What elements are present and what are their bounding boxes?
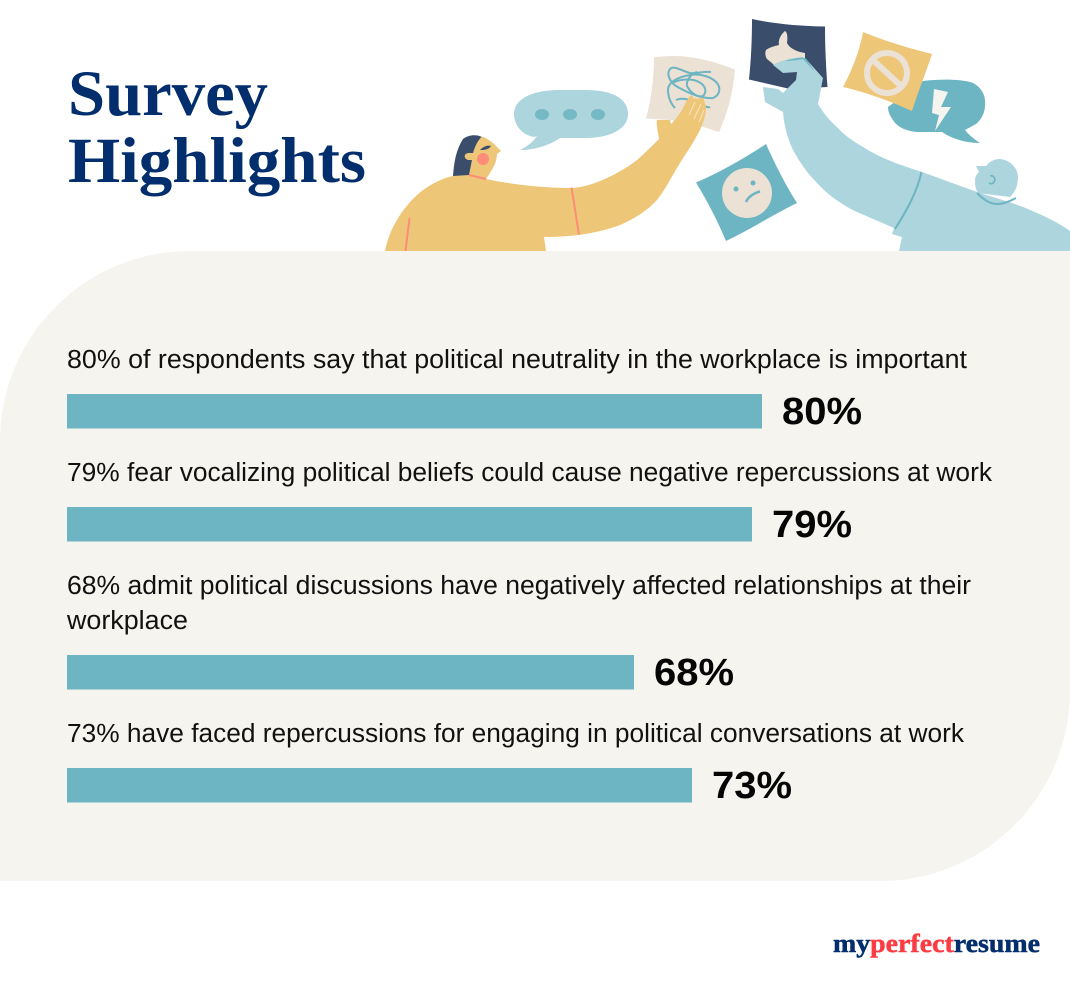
panel: survey background <box>0 251 1070 881</box>
bar group 1 <box>67 346 967 433</box>
bar group 4: 73% <box>712 765 792 807</box>
bar group 1: 80% of respondents say that political neutrality in the workplace is important <box>67 346 967 374</box>
bar group 2 <box>67 459 992 546</box>
icon: speech bubble with dots <box>514 90 628 150</box>
title <box>68 58 366 197</box>
body and arm <box>385 96 706 251</box>
bar group 1: 80% <box>782 391 862 433</box>
illustration: blue person with raised arm <box>763 57 1070 251</box>
bar group 2: 79% fear vocalizing political beliefs could cause negative repercussions at work <box>67 459 992 487</box>
head <box>975 159 1018 197</box>
eye <box>480 146 491 150</box>
title: Survey <box>68 58 268 130</box>
bar group 4 <box>67 720 964 807</box>
bar group 3 <box>66 572 972 694</box>
bar group 4: 73% have faced repercussions for engaging in political conversations at work <box>67 720 964 748</box>
cheek <box>477 153 489 165</box>
hair <box>453 135 482 176</box>
hand accent <box>785 58 815 72</box>
bar group 3: workplace <box>66 607 188 635</box>
icon: speech bubble with lightning <box>888 80 985 143</box>
sleeve and collar lines <box>406 175 579 251</box>
bar group 3: 68% admit political discussions have negatively affected relationships at their <box>67 572 972 600</box>
icon: note with tangled scribble <box>646 56 735 132</box>
bar group 2: 79% <box>772 504 852 546</box>
icon: no sign note <box>843 32 932 111</box>
icon: thumbs up note <box>749 19 828 89</box>
illustration: yellow person with raised arm <box>385 96 706 251</box>
bar group 3: 68% <box>654 652 734 694</box>
finger lines <box>689 102 704 122</box>
icon: sad face note <box>696 144 797 241</box>
logo: myperfectresume <box>833 929 1040 958</box>
head <box>465 136 501 179</box>
title: Highlights <box>68 125 366 197</box>
